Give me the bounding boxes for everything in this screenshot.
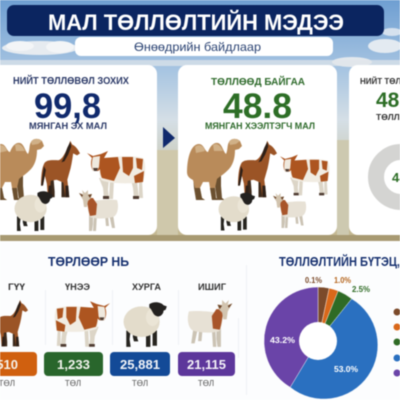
icon: goat — [273, 193, 306, 228]
label: 43.2%: 43.2% — [270, 335, 295, 345]
title bar: МАЛ ТӨЛЛӨЛТИЙН МЭДЭЭ — [48, 10, 344, 35]
icon: camel — [0, 139, 44, 200]
heading: births so far: ТӨЛЛӨӨД БАЙГАА — [211, 75, 305, 88]
label: 2.5%: 2.5% — [352, 285, 370, 294]
panel: birth structure — [264, 254, 400, 399]
panel: total expected births — [0, 65, 157, 235]
heading: total expected: НИЙТ ТӨЛЛӨВӨЛ ЗОХИХ — [13, 74, 129, 87]
icon: cow — [280, 155, 330, 195]
icon: cow — [87, 151, 145, 199]
label: 53.0%: 53.0% — [334, 364, 358, 374]
caption: thousand breeding animals: МЯНГАН ЭХ МАЛ — [29, 121, 107, 132]
column: horse: ГҮҮ — [8, 282, 25, 292]
column: horse — [0, 282, 37, 388]
column: goat: ИШИГ — [198, 282, 226, 292]
column: sheep: 25,881 — [120, 357, 160, 372]
icon: horse — [41, 141, 80, 197]
caption: thousand pregnant animals: МЯНГАН ХЭЭЛТЭГЧ МАЛ — [205, 121, 315, 132]
panel: births so far — [178, 65, 337, 235]
column: goat: 21,115 — [187, 357, 226, 372]
column: goat — [178, 282, 235, 388]
column: sheep: ХУРГА — [132, 282, 162, 292]
column: sheep: ТӨЛ — [132, 379, 148, 388]
heading: by type: ТӨРЛӨӨР НЬ — [48, 254, 129, 269]
chart: donut — [264, 287, 378, 399]
label: 1.0%: 1.0% — [334, 276, 351, 285]
icon: horse — [238, 141, 277, 197]
column: cow — [44, 282, 110, 388]
subtitle: Өнөөдрийн байдлаар — [134, 40, 261, 54]
panel: by type — [0, 241, 400, 400]
title bar — [7, 5, 384, 36]
number: 99,8: 99,8 — [34, 87, 101, 126]
subtitle — [75, 37, 333, 56]
background: sky and steppe — [0, 0, 400, 241]
legend — [394, 308, 400, 376]
column: cow: 1,233 — [57, 357, 90, 372]
icon: goat — [79, 190, 118, 231]
icon: sheep — [219, 193, 255, 230]
arrow — [163, 127, 175, 148]
column: cow: ҮНЭЭ — [65, 282, 91, 292]
icon: camel — [187, 139, 242, 200]
column: cow: ТӨЛ — [65, 379, 81, 388]
chart: progress ring — [376, 152, 400, 202]
column: goat: ТӨЛ — [198, 379, 214, 388]
label: 0.1%: 0.1% — [305, 276, 322, 285]
icon: sheep — [15, 191, 53, 231]
column: sheep — [110, 282, 170, 388]
panel: birth rate — [349, 65, 400, 235]
number: 48.8: 48.8 — [223, 87, 292, 126]
